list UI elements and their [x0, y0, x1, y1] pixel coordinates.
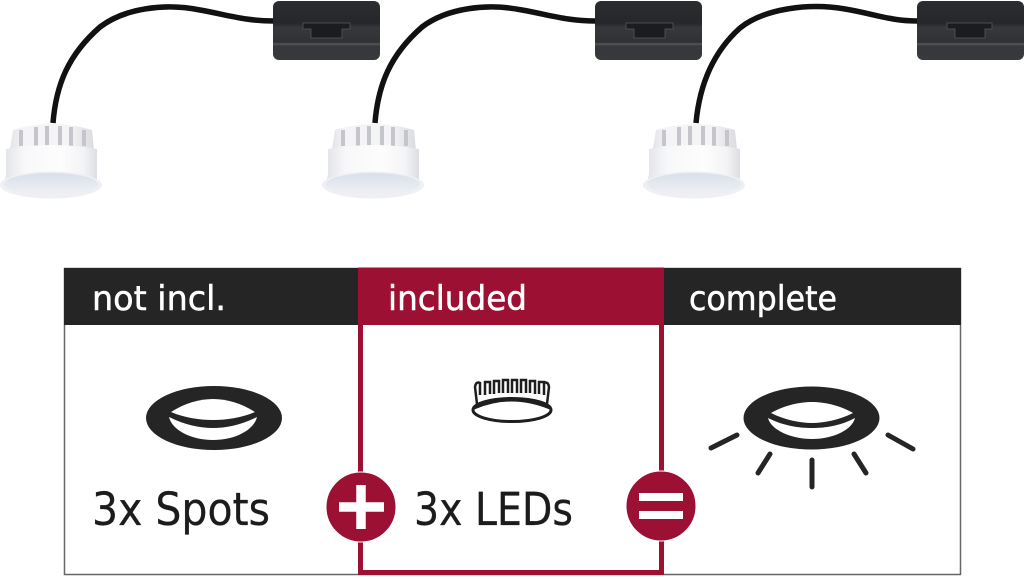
header: complete	[664, 268, 961, 325]
panel: included	[358, 268, 664, 572]
panel: not incl.	[64, 268, 358, 536]
LED module 3	[643, 124, 745, 198]
icon: LED module	[473, 380, 551, 422]
icon: plus sign	[326, 472, 396, 542]
driver box 1	[273, 1, 380, 60]
LED module 2	[322, 124, 424, 198]
cable 3	[696, 7, 918, 123]
red outline	[360, 270, 662, 572]
cable 2	[375, 7, 596, 123]
icon: recessed spot	[146, 386, 282, 450]
outer frame	[64, 268, 960, 574]
light rays	[711, 435, 913, 487]
header: not incl.: not incl.	[92, 279, 226, 319]
header: included	[358, 268, 664, 325]
header: included: included	[388, 279, 527, 319]
LED module 1	[0, 124, 102, 198]
label: 3x Spots: 3x Spots	[92, 483, 270, 536]
driver box 3	[917, 1, 1024, 60]
icon: lit spot	[711, 386, 913, 487]
product photo: LED module 1 with cable and driver	[0, 1, 380, 198]
product photo: LED module 3 with cable and driver	[643, 1, 1024, 198]
header: complete: complete	[689, 279, 837, 319]
comparison table	[64, 268, 961, 574]
driver box 2	[595, 1, 702, 60]
cable 1	[53, 7, 274, 123]
label: 3x LEDs: 3x LEDs	[414, 483, 573, 536]
product photo: LED module 2 with cable and driver	[322, 1, 702, 198]
header: not incl.	[64, 268, 358, 325]
icon: equals sign	[626, 471, 696, 541]
panel: complete	[664, 268, 961, 487]
